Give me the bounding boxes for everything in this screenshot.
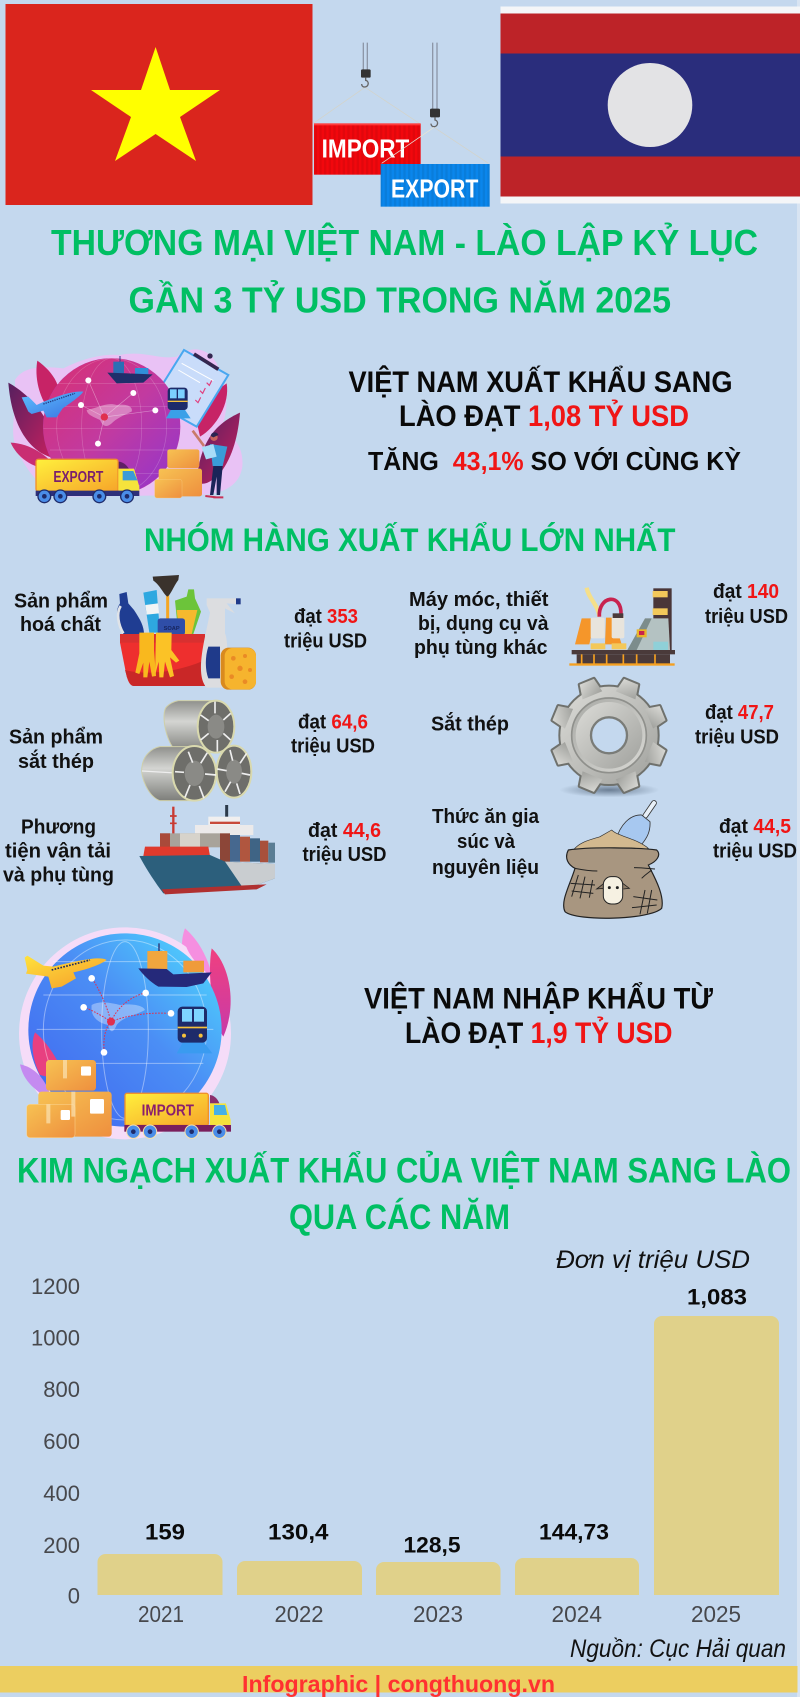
import container xyxy=(314,123,421,175)
value: steel products: triệu USD xyxy=(291,736,375,758)
icon: container ship xyxy=(139,805,275,894)
text: Vietnam exports to Laos xyxy=(348,365,741,476)
export container xyxy=(381,164,490,207)
icon: Vietnam flag xyxy=(6,4,312,205)
icon: feed sack with scoop xyxy=(564,803,662,918)
globe xyxy=(43,358,180,495)
value: steel products: đạt 64,6 xyxy=(298,712,368,734)
value: vehicles and parts xyxy=(302,820,386,866)
ship xyxy=(107,356,153,383)
boxes xyxy=(155,449,202,498)
icon: Laos flag xyxy=(500,6,800,204)
y axis labels xyxy=(31,1274,80,1608)
label: machinery: Máy móc, thiết xyxy=(409,589,549,611)
label: iron and steel: Sắt thép xyxy=(431,712,509,736)
boxes xyxy=(27,1060,112,1138)
icon: import export containers on crane hooks xyxy=(313,43,490,207)
value: iron and steel xyxy=(695,702,779,748)
year labels xyxy=(138,1601,741,1627)
heading: largest export groups: NHÓM HÀNG XUẤT KHẨU LỚN NHẤT xyxy=(144,522,676,558)
value: animal feed: đạt 44,5 xyxy=(719,816,791,838)
value: vehicles and parts: đạt 44,6 xyxy=(308,820,381,842)
label: animal feed: súc và xyxy=(457,831,516,853)
y axis labels: 1200 xyxy=(31,1274,80,1299)
unit note: Đơn vị triệu USD xyxy=(556,1246,750,1274)
text: Vietnam imports from Laos: VIỆT NAM NHẬP KHẨU TỪ xyxy=(364,982,713,1016)
year labels: 2023 xyxy=(413,1601,463,1627)
truck xyxy=(36,459,139,503)
footer band: Infographic | congthuong.vn xyxy=(242,1671,555,1697)
heading: export turnover by year xyxy=(17,1150,791,1237)
value: iron and steel: triệu USD xyxy=(695,726,779,748)
footer band xyxy=(0,1666,798,1697)
value: chemical products: triệu USD xyxy=(284,630,367,652)
value: machinery: đạt 140 xyxy=(713,581,779,603)
label: steel products xyxy=(9,726,103,773)
value labels: 1,083 xyxy=(687,1284,747,1310)
icon: cleaning basket xyxy=(117,575,256,690)
train xyxy=(177,1007,212,1053)
icon: factory machinery xyxy=(569,588,675,666)
value labels: 144,73 xyxy=(539,1520,609,1544)
label: steel products: Sản phẩm xyxy=(9,726,103,748)
year labels: 2021 xyxy=(138,1601,184,1627)
label: machinery: bị, dụng cụ và xyxy=(418,613,549,635)
value: iron and steel: đạt 47,7 xyxy=(705,702,774,724)
y axis labels: 600 xyxy=(43,1429,80,1454)
value: machinery xyxy=(705,581,788,628)
text: Vietnam imports from Laos xyxy=(364,982,713,1050)
person xyxy=(193,431,227,497)
label: chemical products xyxy=(14,590,108,636)
value: animal feed xyxy=(713,816,797,862)
label: vehicles and parts: Phương xyxy=(21,816,96,838)
y axis labels: 1000 xyxy=(31,1326,80,1350)
label: animal feed xyxy=(432,806,540,879)
title: THƯƠNG MẠI VIỆT NAM - LÀO LẬP KỶ LỤC xyxy=(51,221,758,263)
text: Vietnam exports to Laos: LÀO ĐẠT 1,08 TỶ USD xyxy=(399,399,689,433)
label: machinery: phụ tùng khác xyxy=(414,637,548,659)
label: vehicles and parts: và phụ tùng xyxy=(3,864,114,886)
label: steel products: sắt thép xyxy=(18,749,94,773)
label: vehicles and parts xyxy=(3,816,114,886)
value labels xyxy=(145,1284,747,1558)
title xyxy=(51,221,758,320)
value labels: 130,4 xyxy=(268,1520,329,1544)
year labels: 2022 xyxy=(274,1601,324,1627)
import container: IMPORT xyxy=(322,133,409,163)
train xyxy=(166,388,191,418)
truck: EXPORT xyxy=(53,469,104,486)
value: vehicles and parts: triệu USD xyxy=(302,844,386,866)
label: chemical products: hoá chất xyxy=(20,614,101,636)
truck xyxy=(124,1093,231,1138)
y axis labels: 200 xyxy=(43,1533,80,1558)
value labels: 128,5 xyxy=(404,1532,460,1558)
plane xyxy=(22,391,83,417)
text: Vietnam exports to Laos: TĂNG 43,1% SO VỚI CÙNG KỲ xyxy=(368,446,741,476)
label: machinery xyxy=(409,589,549,659)
value: steel products xyxy=(291,712,375,758)
label: chemical products: Sản phẩm xyxy=(14,590,108,612)
clipboard xyxy=(152,350,228,427)
illustration: import globe with truck xyxy=(19,927,231,1139)
year labels: 2025 xyxy=(691,1601,741,1627)
value labels: 159 xyxy=(145,1520,185,1544)
icon: cleaning basket: SOAP xyxy=(164,626,180,632)
value: chemical products: đạt 353 xyxy=(294,606,358,628)
bar chart xyxy=(31,1274,779,1627)
text: Vietnam imports from Laos: LÀO ĐẠT 1,9 TỶ USD xyxy=(405,1016,672,1050)
bars xyxy=(98,1316,779,1595)
value: machinery: triệu USD xyxy=(705,606,788,628)
value: chemical products xyxy=(284,606,367,652)
ship xyxy=(138,943,212,987)
plane xyxy=(25,956,107,988)
icon: gear xyxy=(551,678,667,797)
illustration: export globe with truck xyxy=(8,349,243,503)
title: GẦN 3 TỶ USD TRONG NĂM 2025 xyxy=(128,280,671,320)
icon: steel coils xyxy=(142,701,251,801)
label: animal feed: nguyên liệu xyxy=(432,857,539,879)
year labels: 2024 xyxy=(552,1601,602,1627)
y axis labels: 0 xyxy=(68,1584,80,1608)
y axis labels: 800 xyxy=(43,1377,80,1402)
label: animal feed: Thức ăn gia xyxy=(432,806,540,828)
y axis labels: 400 xyxy=(43,1481,80,1506)
export container: EXPORT xyxy=(391,173,478,203)
heading: export turnover by year: QUA CÁC NĂM xyxy=(289,1197,510,1237)
truck: IMPORT xyxy=(142,1103,194,1120)
label: vehicles and parts: tiện vận tải xyxy=(5,840,111,862)
text: Vietnam exports to Laos: VIỆT NAM XUẤT KHẨU SANG xyxy=(348,365,732,399)
